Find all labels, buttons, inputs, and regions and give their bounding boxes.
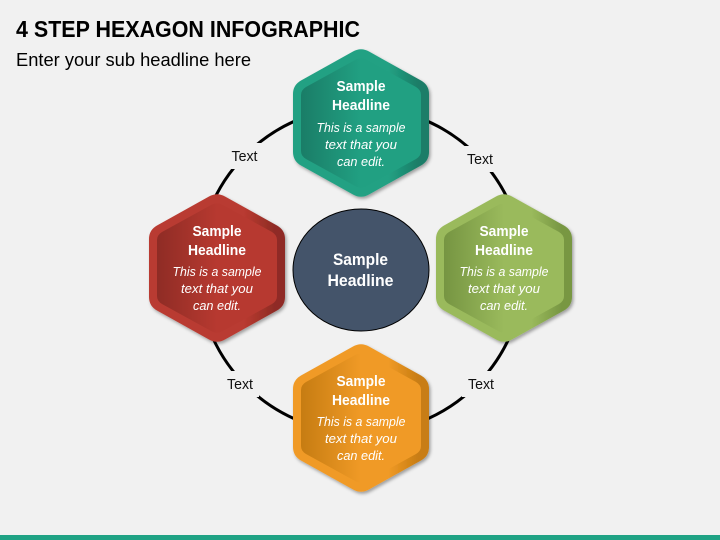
hexagon: green right: Headline bbox=[475, 243, 533, 259]
hexagon: teal top: Headline bbox=[332, 98, 390, 114]
hexagon: teal top bbox=[293, 49, 429, 197]
hexagon: red left: Headline bbox=[188, 243, 246, 259]
hexagon: red left: This is a sample bbox=[172, 265, 262, 279]
label: bottom-right text: Text bbox=[468, 377, 494, 393]
hexagon: teal top: This is a sample bbox=[316, 121, 406, 135]
hexagon: red left: Sample bbox=[192, 224, 242, 240]
label: top-left text bbox=[226, 143, 264, 169]
label: bottom-right text bbox=[462, 371, 500, 397]
hexagon: red left: text that you bbox=[181, 282, 253, 296]
label: bottom-left text bbox=[221, 371, 259, 397]
hexagon: green right bbox=[436, 194, 572, 342]
hexagon: teal top: text that you bbox=[325, 138, 397, 152]
hexagon: red left: can edit. bbox=[193, 299, 241, 313]
title: 4 STEP HEXAGON INFOGRAPHIC bbox=[16, 16, 360, 42]
center circle: Headline bbox=[328, 272, 394, 290]
hexagon: green right: can edit. bbox=[480, 299, 528, 313]
subtitle: Enter your sub headline here bbox=[16, 50, 251, 70]
hexagon: green right: text that you bbox=[468, 282, 540, 296]
center circle: Sample bbox=[333, 251, 388, 269]
center circle bbox=[293, 209, 429, 331]
label: top-right text: Text bbox=[467, 152, 493, 168]
hexagon: green right: Sample bbox=[480, 224, 528, 240]
connecting ring bbox=[198, 107, 524, 433]
hexagon: teal top: can edit. bbox=[337, 155, 385, 169]
hexagon: red left bbox=[149, 194, 285, 342]
label: bottom-left text: Text bbox=[227, 377, 253, 393]
hexagon: orange bottom: text that you bbox=[325, 432, 397, 446]
hexagon: orange bottom: Headline bbox=[332, 393, 390, 409]
hexagon: orange bottom: This is a sample bbox=[316, 415, 406, 429]
bottom bar bbox=[0, 535, 720, 540]
hexagon: orange bottom bbox=[293, 344, 429, 492]
label: top-left text: Text bbox=[232, 149, 258, 165]
hexagon: green right: This is a sample bbox=[460, 265, 549, 279]
hexagon: teal top: Sample bbox=[336, 79, 386, 95]
hexagon: orange bottom: can edit. bbox=[337, 449, 385, 463]
hexagon: orange bottom: Sample bbox=[336, 374, 386, 390]
label: top-right text bbox=[461, 146, 499, 172]
